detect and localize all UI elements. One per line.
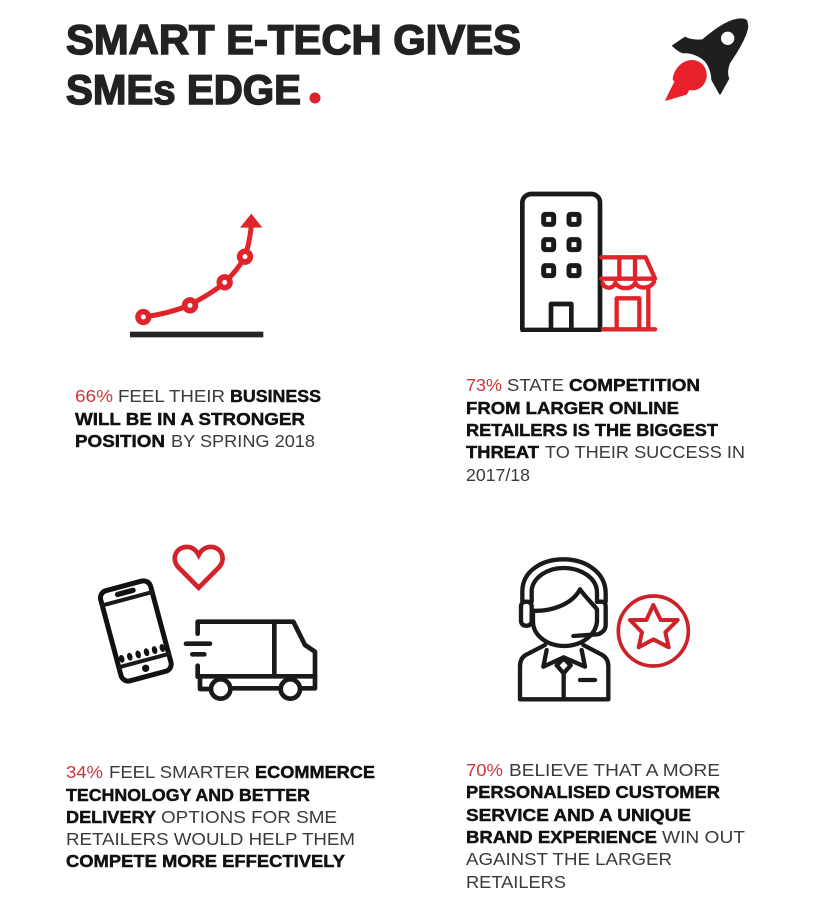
text: 66% stat (75, 386, 321, 451)
text: 73% stat: FROM LARGER ONLINE (466, 398, 679, 418)
text: 70% stat: BRAND EXPERIENCE (466, 827, 657, 847)
text: 70% stat: SERVICE AND A UNIQUE (466, 805, 691, 825)
text: 70% stat: AGAINST THE LARGER (466, 849, 672, 869)
text: 73% stat: 2017/18 (466, 465, 530, 485)
text: 66% stat: 66% (75, 386, 113, 406)
text: 73% stat: COMPETITION (569, 375, 700, 395)
text: 70% stat: 70% (466, 760, 503, 780)
text: 66% stat: BY SPRING 2018 (171, 431, 315, 451)
icon: delivery van (186, 622, 315, 699)
title: SMART E-TECH GIVES (66, 16, 521, 63)
text: 70% stat: RETAILERS (466, 872, 566, 892)
text: 70% stat: PERSONALISED CUSTOMER (466, 782, 720, 802)
text: 34% stat: DELIVERY (66, 807, 156, 827)
text: 66% stat: WILL BE IN A STRONGER (75, 409, 305, 429)
text: 34% stat: FEEL SMARTER (109, 762, 250, 782)
icon: phone (99, 579, 173, 683)
text: 34% stat: COMPETE MORE EFFECTIVELY (66, 851, 345, 871)
text: 70% stat (466, 760, 745, 892)
text: 66% stat: BUSINESS (230, 386, 321, 406)
text: 34% stat (66, 762, 375, 871)
text: 34% stat: TECHNOLOGY AND BETTER (66, 785, 310, 805)
title (66, 16, 521, 113)
text: 70% stat: BELIEVE THAT A MORE (509, 760, 720, 780)
icon: growth chart (130, 214, 263, 337)
text: 70% stat: WIN OUT (662, 827, 745, 847)
text: 73% stat (466, 375, 745, 485)
text: 34% stat: RETAILERS WOULD HELP THEM (66, 829, 355, 849)
text: 34% stat: 34% (66, 762, 103, 782)
text: 66% stat: FEEL THEIR (118, 386, 225, 406)
icon: office building and shop (521, 194, 655, 332)
text: 73% stat: TO THEIR SUCCESS IN (545, 442, 745, 462)
icon: star badge (618, 596, 688, 666)
text: 34% stat: OPTIONS FOR SME (161, 807, 337, 827)
text: 73% stat: THREAT (466, 442, 539, 462)
icon: customer service agent and star badge (520, 559, 688, 699)
icon: rocket (665, 18, 748, 101)
text: 73% stat: STATE (507, 375, 564, 395)
text: 73% stat: 73% (466, 375, 502, 395)
text: 34% stat: ECOMMERCE (255, 762, 375, 782)
icon: heart (175, 547, 223, 588)
text: 73% stat: RETAILERS IS THE BIGGEST (466, 420, 718, 440)
text: 66% stat: POSITION (75, 431, 165, 451)
title: SMEs EDGE (66, 66, 301, 113)
icon: phone, heart and delivery van (99, 547, 315, 699)
